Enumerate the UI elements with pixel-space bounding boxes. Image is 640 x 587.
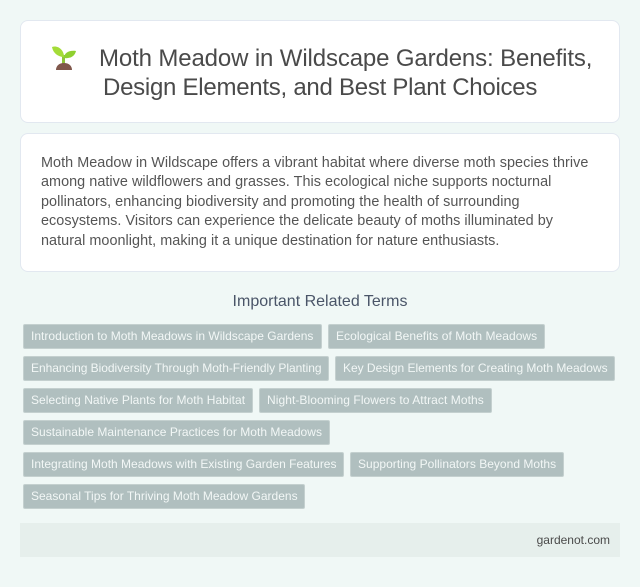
- footer source text: gardenot.com: [537, 533, 610, 547]
- tag: [23, 388, 253, 413]
- description line 1: Moth Meadow in Wildscape offers a vibrant habitat where diverse moth species thrive: [41, 155, 588, 171]
- tag: Enhancing Biodiversity Through Moth-Friendly Planting: [31, 361, 321, 375]
- title line 1: Moth Meadow in Wildscape Gardens: Benefits,: [99, 45, 592, 72]
- tag: Ecological Benefits of Moth Meadows: [336, 329, 537, 343]
- tag: [350, 452, 564, 477]
- tag: [23, 452, 344, 477]
- tag: Seasonal Tips for Thriving Moth Meadow Gardens: [31, 489, 298, 503]
- tag: [23, 484, 305, 509]
- title line 2: Design Elements, and Best Plant Choices: [103, 74, 537, 101]
- tag: Night-Blooming Flowers to Attract Moths: [267, 393, 484, 407]
- tag: [259, 388, 492, 413]
- icon: sprout: [52, 46, 76, 70]
- description line 2: among native wildflowers and grasses. This ecological niche supports nocturnal: [41, 174, 551, 190]
- panel: title card: [20, 20, 620, 123]
- tag: Sustainable Maintenance Practices for Moth Meadows: [31, 425, 322, 439]
- description line 5: natural moonlight, making it a unique destination for nature enthusiasts.: [41, 233, 499, 249]
- tag: Introduction to Moth Meadows in Wildscape Gardens: [31, 329, 313, 343]
- tag: [335, 356, 615, 381]
- heading: related terms: Important Related Terms: [233, 293, 407, 310]
- tag: [23, 324, 322, 349]
- description line 4: ecosystems. Visitors can experience the delicate beauty of moths illuminated by: [41, 213, 553, 229]
- tag: [23, 420, 330, 445]
- tag: [23, 356, 329, 381]
- tag: Integrating Moth Meadows with Existing Garden Features: [31, 457, 336, 471]
- panel: description card: [20, 133, 620, 272]
- tag: Supporting Pollinators Beyond Moths: [358, 457, 556, 471]
- footer bar: [20, 523, 620, 557]
- tag: Selecting Native Plants for Moth Habitat: [31, 393, 245, 407]
- tag: Key Design Elements for Creating Moth Meadows: [343, 361, 608, 375]
- tag: [328, 324, 545, 349]
- description line 3: pollinators, enhancing biodiversity and promoting the health of surrounding: [41, 194, 520, 210]
